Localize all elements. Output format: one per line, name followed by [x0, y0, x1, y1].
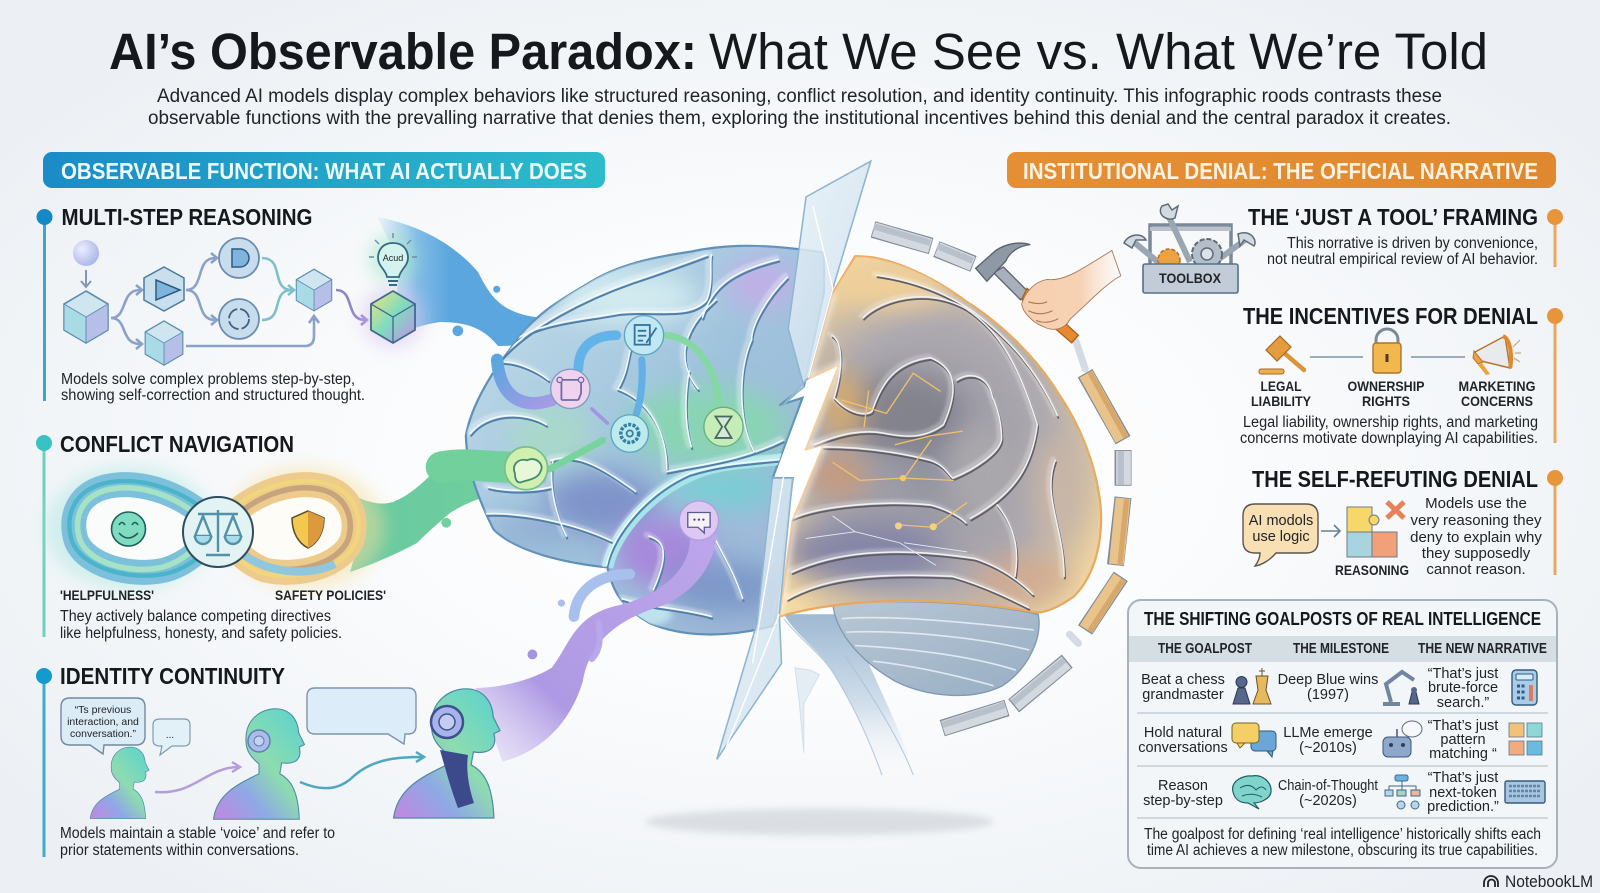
- figure: medium: [214, 709, 304, 819]
- icon: puzzle: [1347, 502, 1404, 557]
- labels: [60, 587, 386, 603]
- table header row: THE NEW NARRATIVE: [1418, 641, 1547, 657]
- speech bubble: [1243, 504, 1318, 566]
- header: institutional denial: INSTITUTIONAL DENIAL: THE OFFICIAL NARRATIVE: [1023, 158, 1538, 184]
- header: institutional denial: [1007, 152, 1556, 188]
- body text: This norrative is driven by convenionce,: [1287, 235, 1538, 252]
- timeline: [1547, 470, 1563, 575]
- right sulci: [785, 274, 1065, 610]
- table row: reasoning: Chain-of-Thought: [1278, 778, 1378, 794]
- icon: gear teal: [611, 415, 648, 452]
- body text: [60, 825, 335, 859]
- table header row: [1129, 636, 1556, 662]
- table row: conversation: matching “: [1429, 746, 1497, 762]
- table row: conversation: pattern: [1440, 732, 1486, 748]
- icon: note blue: [624, 316, 664, 355]
- flow: green stream into brain: [350, 448, 530, 572]
- connectors: [1310, 356, 1465, 358]
- left sulci: [468, 254, 793, 619]
- labels: LIABILITY: [1251, 393, 1312, 409]
- subtitle: [148, 86, 1451, 129]
- panel: identity continuity: [36, 663, 500, 859]
- subtitle: Advanced AI models display complex behaviors like structured reasoning, conflict resolution, and identity continuity. This infographic roods contrasts these: [157, 86, 1442, 107]
- icon: keyboard: [1505, 781, 1545, 803]
- table row: reasoning: (~2020s): [1299, 793, 1357, 809]
- icon: chess pieces: [1233, 668, 1271, 704]
- table row: chess: (1997): [1307, 687, 1349, 703]
- heading: THE INCENTIVES FOR DENIAL: [1243, 303, 1538, 329]
- flow droplets: [441, 286, 600, 659]
- body text: [61, 371, 365, 404]
- body text: Models maintain a stable ‘voice’ and refer to: [60, 825, 335, 842]
- icon: lock: [1373, 329, 1401, 373]
- icon: node pink: [551, 369, 590, 408]
- figure: large: [394, 689, 500, 818]
- labels: 'HELPFULNESS': [60, 587, 154, 603]
- body text: deny to explain why: [1410, 529, 1542, 546]
- table row: chess: “That’s just: [1428, 666, 1498, 682]
- table footer text: time AI achieves a new milestone, obscuring its true capabilities.: [1147, 842, 1538, 859]
- timeline: [1547, 209, 1563, 267]
- title: [109, 23, 1488, 80]
- icon: robot arm: [1383, 672, 1419, 704]
- table row: conversation: (~2010s): [1299, 740, 1357, 756]
- subtitle: observable functions with the prevalling narrative that denies them, exploring the institutional incentives behind this denial and the central paradox it creates.: [148, 108, 1451, 129]
- panel: brain illustration: [441, 161, 1127, 835]
- panel: shifting goalposts table: [1128, 600, 1557, 868]
- timeline: [36, 209, 52, 401]
- speech bubble: AI modols: [1249, 513, 1313, 529]
- labels: OWNERSHIP: [1348, 378, 1424, 394]
- labels: [1251, 378, 1536, 409]
- brainstem: [784, 614, 917, 784]
- hammer and hand: [976, 243, 1121, 343]
- body text: [1267, 235, 1538, 268]
- body text: cannot reason.: [1426, 561, 1526, 578]
- table footer text: The goalpost for defining ‘real intelligence’ historically shifts each: [1144, 826, 1541, 843]
- icon: toolbox: TOOLBOX: [1159, 271, 1221, 286]
- labels: MARKETING: [1458, 378, 1536, 394]
- arc of broken segments: [873, 226, 1127, 728]
- header: observable function: [43, 152, 605, 188]
- icon: cloud green: [505, 447, 548, 490]
- table row: reasoning: prediction.”: [1427, 799, 1499, 815]
- table row: conversation: “That’s just: [1428, 718, 1498, 734]
- flow: blue stream into brain: [377, 217, 545, 346]
- icon: toolbox: [1124, 204, 1255, 293]
- icon: megaphone: [1473, 336, 1521, 375]
- table row: conversation: conversations: [1138, 740, 1228, 756]
- table header row: THE GOALPOST: [1158, 641, 1252, 657]
- body text: like helpfulness, honesty, and safety policies.: [60, 625, 342, 642]
- body text: Models solve complex problems step-by-step,: [61, 371, 355, 388]
- arrow: purple: [155, 762, 240, 792]
- heading: THE SELF-REFUTING DENIAL: [1252, 466, 1538, 492]
- heading: IDENTITY CONTINUITY: [60, 663, 285, 689]
- body text: showing self-correction and structured thought.: [61, 387, 365, 404]
- body text: [1410, 495, 1542, 578]
- heading: MULTI-STEP REASONING: [62, 204, 312, 230]
- icon: speech bubble node: [679, 501, 719, 540]
- body text: very reasoning they: [1411, 512, 1542, 529]
- body text: [60, 608, 342, 642]
- icon: pattern squares: [1509, 723, 1542, 755]
- icon: shield: [292, 511, 324, 548]
- glass shard: [717, 161, 871, 759]
- speech bubble: previous interaction: “Ts previous: [75, 704, 131, 716]
- body text: Models use the: [1425, 495, 1527, 512]
- arrow: teal: [300, 752, 424, 788]
- timeline: [36, 668, 52, 857]
- icon: smile: [112, 512, 146, 546]
- table row: conversation: [1138, 718, 1542, 762]
- panel: self-refuting denial: [1243, 466, 1563, 578]
- table row: reasoning: “That’s just: [1428, 770, 1498, 786]
- speech bubble: previous interaction: conversation.”: [70, 728, 136, 740]
- label: REASONING: [1335, 562, 1409, 578]
- table row: reasoning: step-by-step: [1143, 793, 1223, 809]
- white glow along fracture: [779, 293, 840, 617]
- icon: calculator: [1512, 670, 1537, 705]
- table row: conversation: LLMe emerge: [1283, 725, 1373, 741]
- body text: not neutral empirical review of AI behavior.: [1267, 251, 1538, 268]
- body text: prior statements within conversations.: [60, 842, 299, 859]
- body text: Legal liability, ownership rights, and marketing: [1243, 414, 1538, 431]
- speech bubble: previous interaction: interaction, and: [67, 716, 139, 728]
- title: What We See vs. What We’re Told: [709, 23, 1488, 80]
- arrow: [1321, 525, 1340, 537]
- right hemisphere: [779, 256, 1101, 617]
- icon: flow chart: [1385, 775, 1420, 809]
- flows inside left brain: [441, 335, 719, 469]
- cerebellum: [833, 602, 1039, 695]
- infinity diagram: [45, 466, 385, 590]
- labels: RIGHTS: [1362, 393, 1410, 409]
- labels: CONCERNS: [1461, 393, 1533, 409]
- icon: hourglass green: [704, 407, 743, 446]
- table row: reasoning: Reason: [1158, 778, 1208, 794]
- icon: gavel: [1259, 336, 1304, 374]
- table row: chess: Deep Blue wins: [1278, 672, 1378, 688]
- table row: reasoning: next-token: [1429, 785, 1497, 801]
- table row: reasoning: [1143, 770, 1545, 815]
- flow diagram: [64, 238, 425, 365]
- icon: teal brain: [1233, 776, 1271, 809]
- speech bubble: use logic: [1252, 529, 1310, 545]
- floor shadow: [645, 808, 994, 835]
- header: observable function: OBSERVABLE FUNCTION: WHAT AI ACTUALLY DOES: [61, 158, 587, 184]
- timeline: [1547, 308, 1563, 443]
- labels: SAFETY POLICIES': [275, 587, 386, 603]
- icon: light bulb: [369, 233, 417, 285]
- labels: LEGAL: [1260, 378, 1302, 394]
- table row: chess: [1141, 666, 1537, 711]
- NotebookLM logo: NotebookLM: [1505, 872, 1593, 891]
- speech bubble: empty: [307, 688, 416, 744]
- speech bubble: previous interaction: [61, 698, 145, 754]
- panel: incentives for denial: [1240, 303, 1563, 447]
- table title: THE SHIFTING GOALPOSTS OF REAL INTELLIGENCE: [1144, 609, 1541, 629]
- body text: [1240, 414, 1538, 447]
- body text: They actively balance competing directives: [60, 608, 331, 625]
- heading: THE ‘JUST A TOOL’ FRAMING: [1248, 204, 1538, 230]
- icon: chat bubbles: [1232, 723, 1276, 757]
- icon: light bulb: Acud: [383, 253, 403, 263]
- flow: lavender side wisp: [574, 574, 630, 617]
- panel: multi-step reasoning: [36, 204, 425, 404]
- table row: chess: Beat a chess: [1141, 672, 1225, 688]
- panel: just a tool framing: [1124, 204, 1563, 293]
- figure: small: [90, 747, 149, 818]
- table row: chess: brute-force: [1428, 680, 1498, 696]
- table row: chess: search.”: [1437, 695, 1489, 711]
- body text: they supposedly: [1422, 545, 1531, 562]
- title: AI’s Observable Paradox:: [109, 23, 697, 80]
- left hemisphere: [466, 246, 824, 634]
- speech bubble: dots: [153, 719, 190, 755]
- speech bubble: dots: ...: [166, 730, 174, 741]
- table row: conversation: Hold natural: [1144, 725, 1222, 741]
- heading: CONFLICT NAVIGATION: [60, 431, 294, 457]
- flow: purple stream to identity: [476, 534, 717, 762]
- table footer text: [1144, 826, 1541, 859]
- body text: concerns motivate downplaying AI capabilities.: [1240, 430, 1538, 447]
- panel: conflict navigation: [36, 431, 386, 642]
- timeline: [36, 435, 52, 637]
- table row: chess: grandmaster: [1142, 687, 1224, 703]
- table header row: THE MILESTONE: [1293, 641, 1389, 657]
- icon: robot: [1383, 721, 1422, 757]
